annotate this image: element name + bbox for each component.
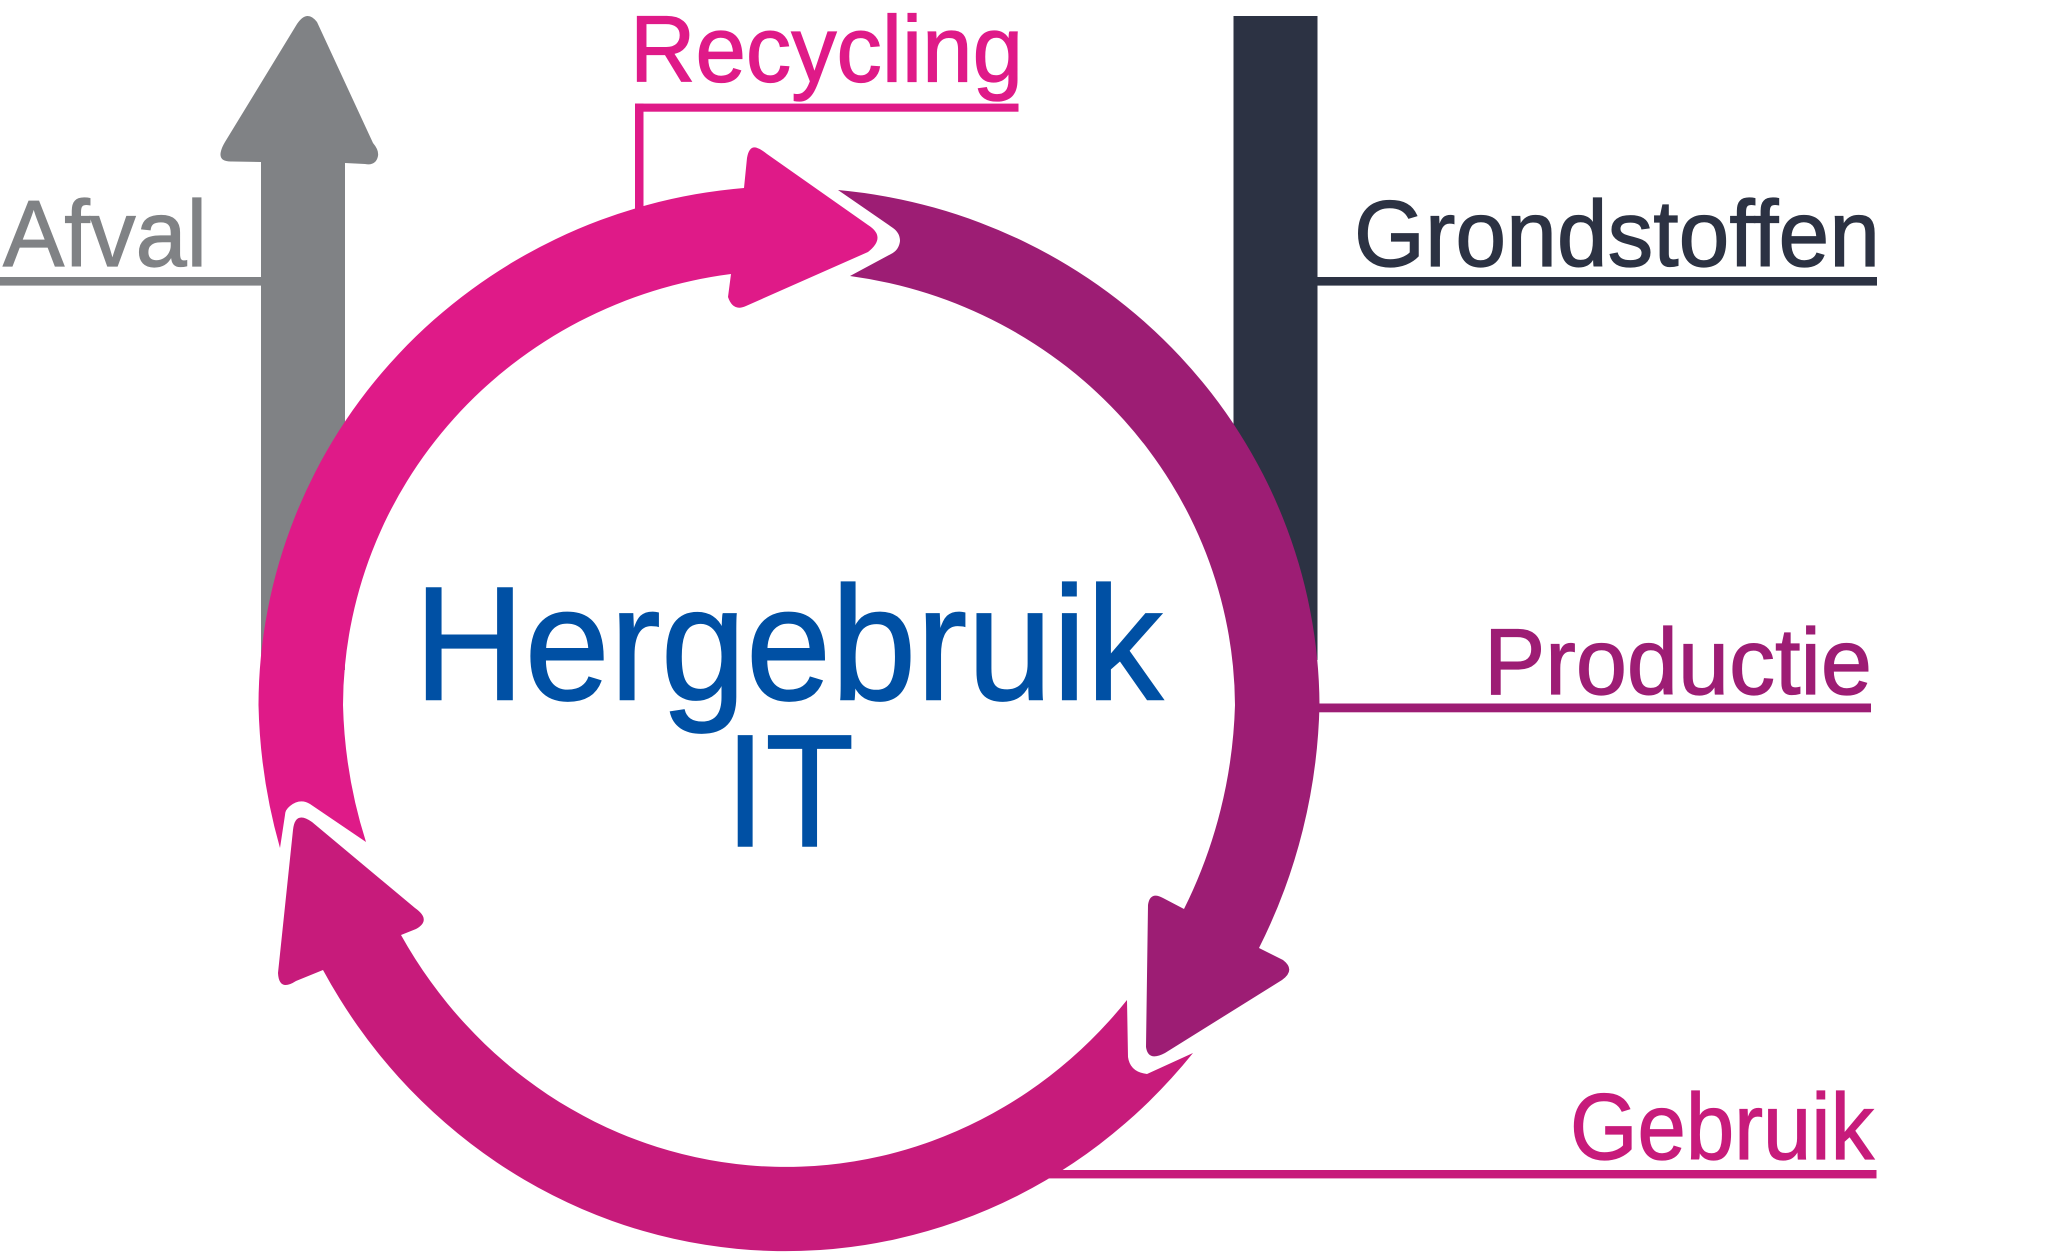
connector: Recycling line [635, 104, 1018, 224]
arrow: Afval waste output [0, 16, 378, 670]
cycle arrow: purple production [838, 190, 1320, 1056]
cycle arrow: magenta use [278, 818, 1193, 1251]
label: Afval: Afval [3, 181, 207, 286]
line: Productie [1300, 704, 1871, 712]
title: Hergebruik: Hergebruik [414, 554, 1164, 734]
label: Productie: Productie [1484, 609, 1872, 714]
title: IT: IT [725, 701, 854, 880]
line: Gebruik [1040, 1170, 1876, 1178]
label: Grondstoffen: Grondstoffen [1354, 181, 1880, 286]
label: Gebruik: Gebruik [1570, 1074, 1875, 1179]
cycle arrow: pink recycling [258, 147, 878, 848]
bar: Grondstoffen input [1234, 16, 1877, 660]
